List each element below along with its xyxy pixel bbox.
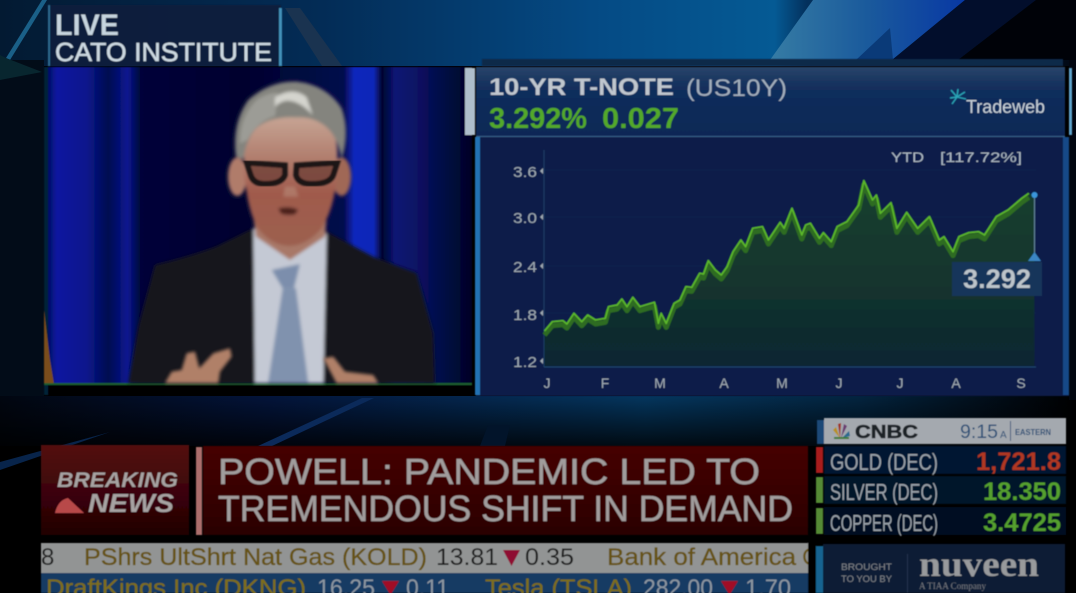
live bug: Cato Institute [48,5,282,67]
stock ticker: C [802,544,819,571]
sponsor panel: Nuveen: A TIAA Company [919,582,986,592]
x axis month labels: M [654,375,666,391]
YTD label: YTD [891,149,924,165]
glasses [247,163,337,184]
chart header: 0.027 [602,103,679,135]
CNBC clock bar: EASTERN [1015,427,1051,437]
x axis month labels [544,375,1026,391]
current value callout [952,262,1042,296]
x axis month labels: A [719,375,729,391]
x axis month labels: F [601,375,609,391]
silver row [816,477,1061,506]
copper row: COPPER (DEC) [830,510,938,536]
chart header: 3.292% [489,103,587,135]
live bug: Cato Institute: LIVE [55,9,119,42]
stock ticker: Bank of America [607,544,797,571]
CNBC clock bar: A [1000,430,1007,441]
breaking news badge [41,445,189,535]
headline banner [196,446,808,535]
gold row: GOLD (DEC) [830,449,938,475]
stock ticker: PShrs UltShrt Nat Gas (KOLD) [84,544,427,571]
sponsor panel: Nuveen: nuveen [919,544,1039,584]
stock ticker: 8 [41,544,54,571]
y axis labels: 3.0 [513,210,537,227]
headline banner: POWELL: PANDEMIC LED TO [218,451,760,492]
x axis month labels: S [1016,375,1026,391]
silver row: SILVER (DEC) [830,479,938,505]
breaking news badge: NEWS [88,488,175,518]
x axis month labels: A [951,375,961,391]
chart panel: 10-yr T-note [465,59,1072,396]
line chart [544,150,1041,367]
chart header: (US10Y) [686,75,787,102]
YTD percentage: [117.72%] [940,149,1022,165]
copper row: 3.4725 [983,509,1061,537]
sponsor panel: Nuveen: TO YOU BY [841,574,893,585]
speaker figure [128,82,435,383]
y axis labels: 1.2 [513,354,537,371]
sponsor panel: Nuveen [816,544,1065,593]
hands [165,348,378,383]
gold row: 1,721.8 [976,448,1061,476]
commodities table [816,446,1066,537]
y axis labels: 3.6 [513,164,537,181]
x axis month labels: J [836,375,842,391]
stock ticker: 13.81 [436,544,498,571]
sponsor panel: Nuveen: BROUGHT [841,562,892,573]
stock ticker [41,540,819,593]
CNBC peacock logo [833,423,850,439]
live bug: Cato Institute: CATO INSTITUTE [55,37,272,67]
x axis month labels: J [896,375,904,391]
x axis month labels: J [544,375,550,391]
CNBC clock bar: 9:15 [960,422,998,443]
copper row [816,508,1061,537]
background graphics [0,0,1076,470]
chart header: 10-YR T-NOTE [489,74,674,101]
CNBC clock bar: CNBC [855,422,918,442]
video panel: speaker in front of blue curtain [44,67,472,395]
chart header [465,67,1072,137]
x axis month labels: M [776,375,788,391]
y axis labels: 1.8 [513,307,537,324]
tradeweb logo: Tradeweb [966,97,1045,117]
y axis labels [513,164,543,371]
tradeweb logo [950,89,1045,117]
gold row [816,447,1061,476]
breaking news badge: BREAKING [57,469,178,492]
stock ticker: 0.35 [525,544,574,571]
headline banner: TREMENDOUS SHIFT IN DEMAND [218,488,793,529]
CNBC clock bar [817,418,1066,444]
current value callout: 3.292 [963,264,1031,294]
silver row: 18.350 [983,478,1061,506]
y axis labels: 2.4 [513,259,537,276]
